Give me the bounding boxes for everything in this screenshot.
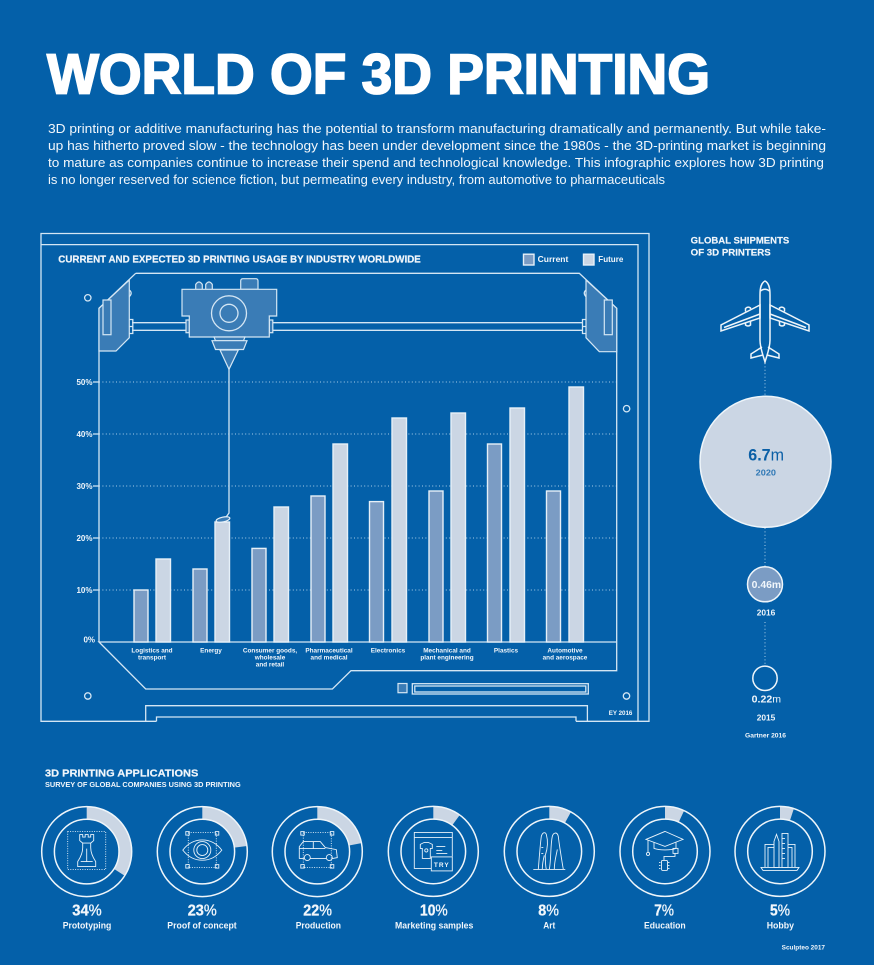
icon: graduation cap: [646, 831, 683, 870]
bubble: 2020: 2020: [756, 467, 776, 477]
label: Proof of concept: [167, 920, 237, 930]
donut: marketing samples: [388, 806, 478, 930]
bubble: 2015: 0.22m: [752, 694, 781, 706]
icon: sculptures: [533, 833, 565, 869]
x axis category labels: Logistics and: [131, 648, 173, 655]
title: WORLD OF 3D PRINTING: [47, 42, 710, 106]
percent: 7%: [654, 903, 674, 920]
intro text block: is no longer reserved for science fiction, but permeating every industry, from automotive to pharmaceuticals: [48, 173, 665, 187]
x axis category labels: Electronics: [371, 648, 406, 655]
y axis labels: [76, 378, 99, 644]
label: Production: [296, 920, 341, 930]
printer body lines: [99, 273, 617, 689]
panel: usage by industry chart: [41, 234, 649, 721]
percent: 8%: [538, 903, 559, 920]
donut: hobby: [735, 806, 825, 930]
printer rail: [132, 323, 583, 330]
percent: 5%: [770, 903, 790, 920]
intro text block: up has hitherto proved slow - the technology has been under development since the 1980s - the 3D-printing market is beginning: [48, 139, 826, 153]
left bracket: [99, 280, 133, 351]
bubble: 2020: 6.7m: [748, 446, 784, 465]
label: Hobby: [767, 920, 795, 930]
icon: car: [299, 832, 337, 868]
gridlines: [99, 382, 617, 590]
x axis category labels: Automotive: [547, 648, 583, 655]
icon: web page with try button: TRY: [434, 862, 450, 869]
intro text block: to mature as companies continue to increase their spend and technological knowledge. This infographic explores how 3D printing: [48, 156, 824, 170]
y axis labels: 50%: [76, 378, 92, 387]
percent: 23%: [188, 903, 217, 920]
source: EY 2016: EY 2016: [609, 710, 633, 717]
intro text block: 3D printing or additive manufacturing has the potential to transform manufacturing dramatically and permanently. But while take-: [48, 122, 826, 136]
shipments heading: GLOBAL SHIPMENTS: [691, 236, 789, 247]
icon: rook: [68, 832, 106, 870]
x axis category labels: wholesale: [254, 655, 286, 662]
y axis labels: 0%: [83, 636, 95, 644]
panel: global shipments: [691, 236, 831, 740]
bubble: 2015: 2015: [757, 713, 776, 723]
percent: 22%: [303, 903, 332, 920]
x axis category labels: Energy: [200, 648, 222, 655]
icon: laptop, pencil and ruler: [761, 833, 799, 870]
x axis category labels: and medical: [311, 655, 348, 662]
legend: Current: [538, 254, 569, 264]
bubble: 2016: 0.46m: [752, 580, 781, 591]
chart heading: CURRENT AND EXPECTED 3D PRINTING USAGE BY INDUSTRY WORLDWIDE: [58, 255, 421, 266]
panel: applications: [42, 769, 825, 951]
x axis category labels: Consumer goods,: [243, 648, 297, 655]
donut: art: [504, 806, 594, 930]
source: Sculpteo 2017: Sculpteo 2017: [782, 944, 825, 951]
y axis labels: 30%: [76, 482, 92, 491]
printer frame outline: [41, 234, 649, 721]
filament: [216, 369, 230, 523]
bubble: 2016: 2016: [757, 608, 776, 618]
donut: education: [620, 806, 710, 930]
y axis labels: 20%: [76, 534, 92, 543]
x axis category labels: and retail: [256, 662, 284, 669]
applications subheading: SURVEY OF GLOBAL COMPANIES USING 3D PRINTING: [45, 780, 241, 789]
applications heading: 3D PRINTING APPLICATIONS: [45, 769, 198, 780]
percent: 34%: [72, 903, 102, 920]
y axis labels: 10%: [76, 586, 92, 595]
donut: prototyping: [42, 807, 132, 930]
shipments heading: OF 3D PRINTERS: [691, 247, 771, 258]
bubble: 2020: [700, 396, 831, 527]
bars: [134, 387, 584, 642]
x axis category labels: plant engineering: [420, 655, 474, 662]
shipments heading: [691, 236, 789, 258]
icon: airplane: [721, 281, 809, 362]
x axis category labels: Plastics: [494, 648, 519, 655]
x axis category labels: Mechanical and: [423, 648, 471, 655]
printer slots: [398, 684, 588, 694]
intro text block: [48, 122, 826, 187]
dotted connector: [764, 363, 766, 665]
bubble: 2015: [752, 666, 781, 723]
label: Art: [543, 920, 555, 930]
x axis category labels: [131, 648, 588, 669]
x axis category labels: transport: [138, 655, 167, 662]
x axis category labels: Pharmaceutical: [305, 648, 353, 655]
bubble: 2016: [748, 567, 782, 618]
donut: production: [272, 807, 362, 930]
icon: eye: [183, 832, 222, 868]
percent: 10%: [420, 903, 448, 920]
label: Education: [644, 920, 686, 930]
right bracket: [582, 280, 617, 352]
y axis labels: 40%: [76, 430, 92, 439]
label: Prototyping: [63, 920, 111, 930]
x axis category labels: and aerospace: [543, 655, 588, 662]
legend: [524, 254, 624, 265]
donut: proof of concept: [157, 807, 247, 930]
source: Gartner 2016: Gartner 2016: [745, 733, 786, 740]
print head: [182, 279, 277, 369]
label: Marketing samples: [395, 920, 473, 930]
legend: Future: [598, 254, 624, 264]
mounting holes: [85, 295, 630, 699]
